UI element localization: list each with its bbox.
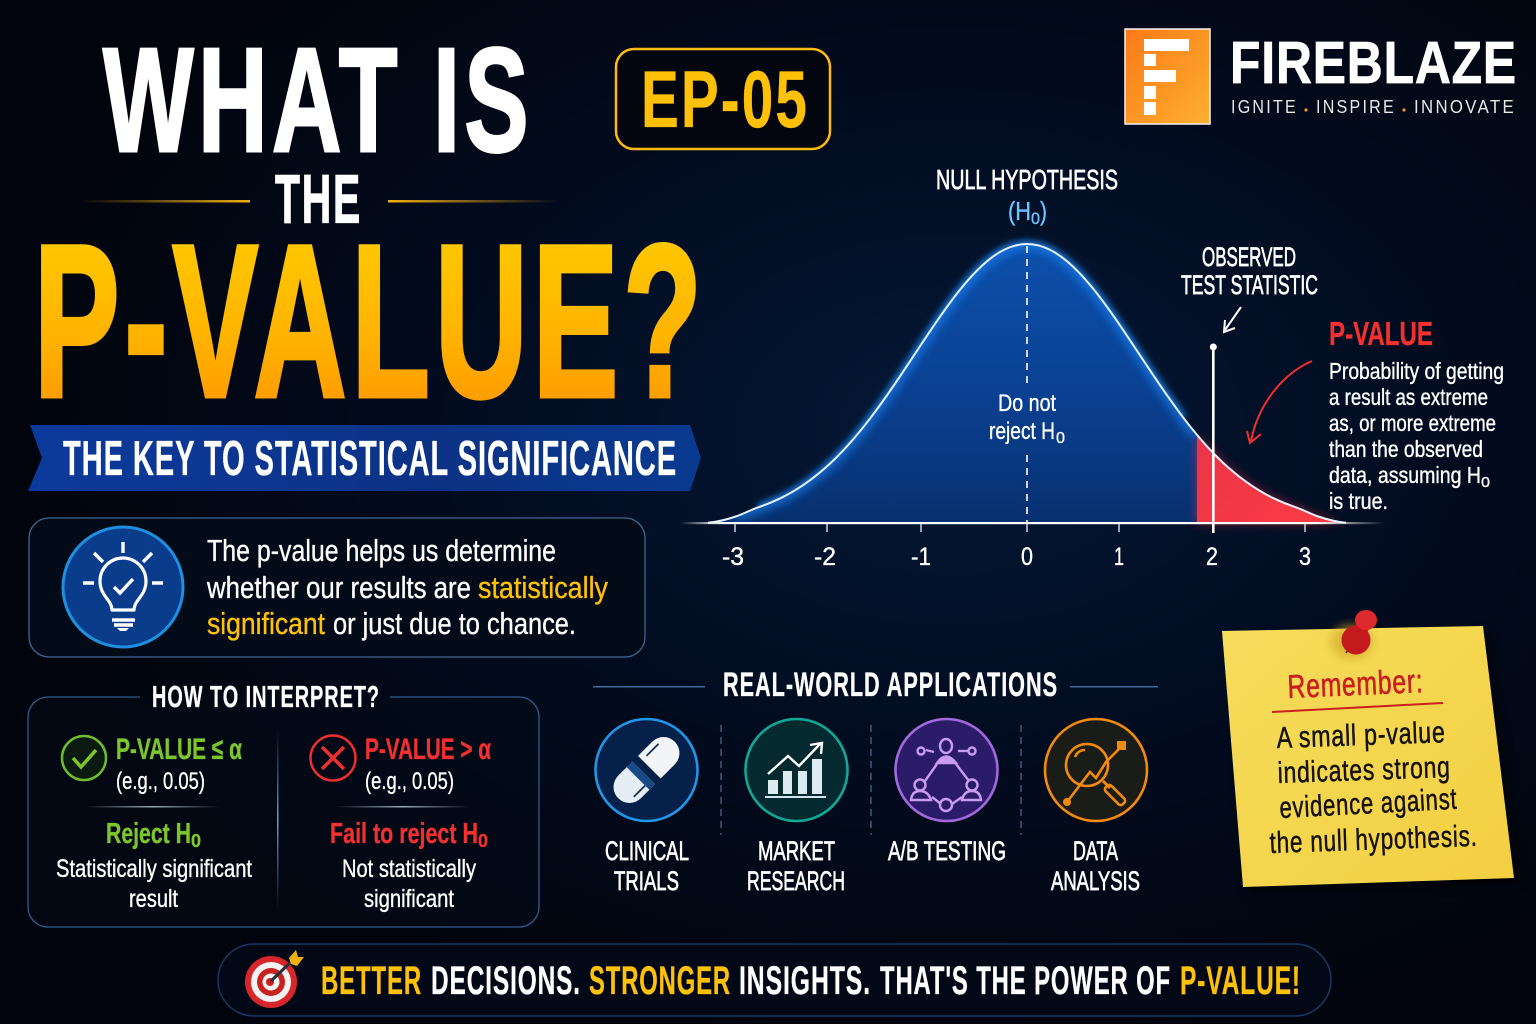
banner text: INSIGHTS. [739, 959, 871, 1003]
column: fail to reject: (e.g., 0.05) [365, 768, 454, 795]
curve glow [758, 244, 1184, 507]
column: fail to reject: significant [364, 885, 454, 913]
column: fail to reject: P-VALUE > α [365, 733, 491, 766]
axis: 0 [1021, 543, 1033, 571]
banner text: THAT'S THE POWER OF [880, 959, 1171, 1003]
application: clinical trials: TRIALS [614, 866, 679, 896]
callout: p-value [1329, 315, 1504, 514]
column: fail to reject [310, 733, 491, 913]
axis: 2 [1206, 543, 1218, 571]
bottom banner [218, 944, 1331, 1016]
logo: fireblaze [1125, 29, 1517, 124]
icon: magnifier with data [1045, 719, 1147, 821]
note text: indicates strong [1277, 751, 1451, 790]
definition text: The p-value helps us determine [207, 533, 556, 568]
callout: p-value: 0 [1481, 474, 1490, 491]
column: reject: result [129, 885, 178, 913]
column: fail to reject: Fail to reject H [330, 818, 478, 850]
icon: F mark [1125, 29, 1210, 124]
column: reject: 0 [191, 831, 201, 851]
column: reject: Statistically significant [56, 855, 252, 883]
axis: 1 [1114, 543, 1124, 571]
callout: p-value: a result as extreme [1329, 384, 1488, 410]
icon: pill [596, 719, 698, 821]
title [34, 18, 707, 442]
callout: p-value: as, or more extreme [1329, 410, 1496, 436]
label: null hypothesis: 0 [1031, 209, 1040, 228]
banner text: P-VALUE! [1180, 959, 1301, 1003]
label: null hypothesis [936, 164, 1118, 228]
subtitle ribbon [28, 425, 701, 491]
callout: p-value: than the observed [1329, 436, 1483, 462]
column: fail to reject: 0 [478, 831, 488, 851]
episode badge [616, 49, 830, 149]
label: do not reject: reject H [989, 418, 1055, 445]
label: null hypothesis: NULL HYPOTHESIS [936, 164, 1118, 195]
banner text: DECISIONS. [431, 959, 581, 1003]
heading: HOW TO INTERPRET? [152, 679, 380, 714]
label: observed test statistic: TEST STATISTIC [1181, 270, 1318, 300]
episode badge: EP-05 [641, 55, 809, 145]
red tail glow [1197, 435, 1340, 523]
inner blue glow along the curve [736, 244, 1197, 516]
application: clinical trials [596, 719, 698, 896]
label: null hypothesis: (H [1008, 196, 1031, 226]
banner text: STRONGER [589, 959, 731, 1003]
icon: red push pin [1342, 610, 1377, 654]
tagline: INSPIRE [1316, 97, 1396, 117]
note text: A small p-value [1276, 716, 1446, 755]
definition text: whether our results are [206, 570, 471, 605]
application: clinical trials: CLINICAL [605, 836, 689, 866]
observed statistic marker [1210, 344, 1217, 533]
blue area [720, 246, 1197, 522]
column: reject [56, 733, 252, 913]
icon: people network [896, 719, 998, 821]
icon: lightbulb with check [63, 527, 183, 647]
label: do not reject: Do not [998, 390, 1056, 417]
application: data analysis: ANALYSIS [1051, 866, 1140, 896]
banner text: BETTER [321, 959, 422, 1003]
chart: normal distribution [680, 164, 1504, 571]
axis: -1 [911, 543, 931, 571]
axis: -3 [722, 543, 744, 571]
heading: REAL-WORLD APPLICATIONS [723, 666, 1058, 704]
application: a/b testing: A/B TESTING [888, 836, 1006, 866]
application: data analysis: DATA [1073, 836, 1118, 866]
icon: green check [62, 736, 106, 780]
title line: what is: WHAT IS [103, 18, 533, 183]
tagline: IGNITE [1231, 97, 1298, 117]
application: market research: MARKET [758, 836, 835, 866]
note text [1269, 716, 1478, 860]
icon: red cross [310, 736, 356, 780]
axis: 3 [1299, 543, 1311, 571]
title line: p-value: P-VALUE? [34, 200, 707, 442]
panel: how to interpret [28, 679, 539, 927]
label: observed test statistic: OBSERVED [1202, 242, 1296, 272]
note text: evidence against [1279, 783, 1458, 825]
axis [680, 522, 1385, 571]
callout: p-value: P-VALUE [1329, 315, 1433, 352]
application: a/b testing [888, 719, 1006, 866]
note heading: Remember: [1287, 662, 1424, 705]
subtitle ribbon: THE KEY TO STATISTICAL SIGNIFICANCE [63, 432, 677, 486]
sticky note: remember [1222, 610, 1521, 895]
application: market research: RESEARCH [747, 866, 845, 896]
mean dashed line [1026, 246, 1028, 523]
curve line [708, 244, 1346, 523]
arrow: to p-value tail [1247, 361, 1312, 443]
arrow: to observed statistic [1224, 307, 1241, 332]
title line: the: THE [275, 160, 362, 238]
banner text [321, 959, 1301, 1003]
definition text: significant [207, 606, 325, 641]
column: reject: (e.g., 0.05) [116, 768, 205, 795]
panel: definition [29, 518, 645, 657]
icon: target with arrow [245, 950, 304, 1008]
section: real-world applications [593, 666, 1158, 896]
application: market research [746, 719, 848, 896]
tagline [1231, 97, 1516, 117]
p-value tail area [1197, 436, 1339, 523]
definition text: statistically [478, 570, 608, 605]
column: fail to reject: Not statistically [342, 855, 476, 883]
application: data analysis [1045, 719, 1147, 896]
icon: bar chart with arrow [746, 719, 848, 821]
label: do not reject: 0 [1056, 430, 1065, 447]
column: reject: P-VALUE ≤ α [116, 733, 242, 766]
label: observed test statistic [1181, 242, 1318, 300]
label: null hypothesis: ) [1040, 196, 1047, 226]
axis: -2 [814, 543, 836, 571]
definition text [206, 533, 608, 641]
definition text: or just due to chance. [333, 606, 576, 641]
callout: p-value: Probability of getting [1329, 358, 1504, 384]
column: reject: Reject H [106, 818, 191, 850]
callout: p-value: data, assuming H [1329, 462, 1481, 488]
callout: p-value: is true. [1329, 488, 1388, 514]
label: do not reject [989, 390, 1065, 447]
tagline: INNOVATE [1414, 97, 1516, 117]
